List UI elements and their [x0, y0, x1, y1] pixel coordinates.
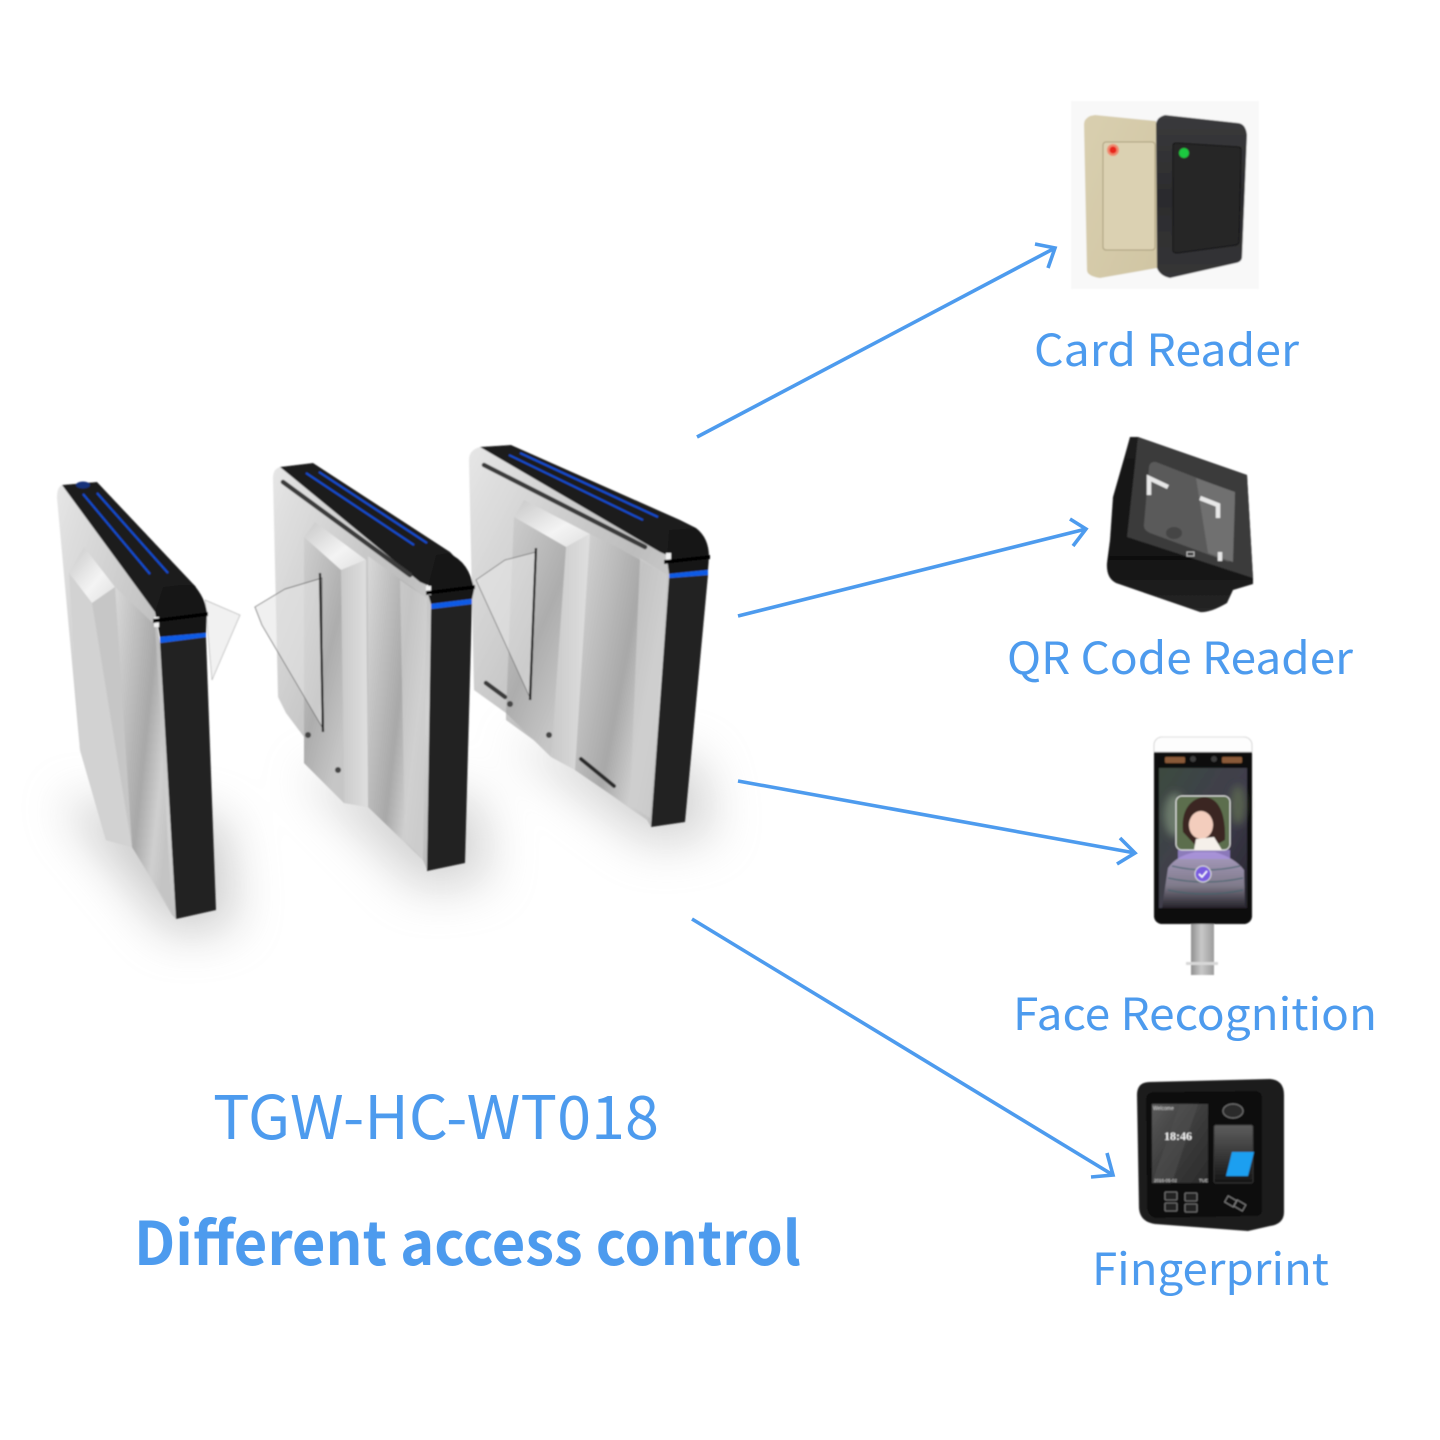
label: QR code reader: QR Code Reader [1007, 623, 1354, 687]
icon: card reader [1071, 101, 1259, 289]
arrow to card reader [697, 244, 1055, 437]
icon: fingerprint terminal: 18:46 [1164, 1129, 1192, 1143]
label: card reader: Card Reader [1034, 315, 1300, 379]
gate 1 (left pedestal) [57, 482, 240, 919]
label: face recognition: Face Recognition [1013, 979, 1377, 1043]
icon: fingerprint terminal [1137, 1079, 1284, 1231]
icon: fingerprint terminal: TUE [1199, 1178, 1208, 1183]
icon: fingerprint terminal: 2016-05-02 [1154, 1178, 1178, 1183]
turnstile: three swing gate pedestals [57, 445, 710, 919]
gate 3 (right pedestal) [469, 445, 710, 827]
icon: face recognition terminal [1154, 737, 1252, 975]
arrow to face recognition [738, 781, 1135, 864]
main heading: Different access control [134, 1196, 801, 1283]
label: fingerprint: Fingerprint [1092, 1234, 1329, 1298]
turnstile floor shadow [60, 740, 715, 935]
arrow to fingerprint [692, 919, 1113, 1177]
model number heading: TGW-HC-WT018 [213, 1070, 659, 1157]
arrow to QR code reader [738, 519, 1086, 616]
icon: QR code reader [1107, 437, 1253, 612]
icon: fingerprint terminal: Welcome [1153, 1106, 1174, 1112]
gate 2 (middle pedestal) [255, 463, 475, 871]
